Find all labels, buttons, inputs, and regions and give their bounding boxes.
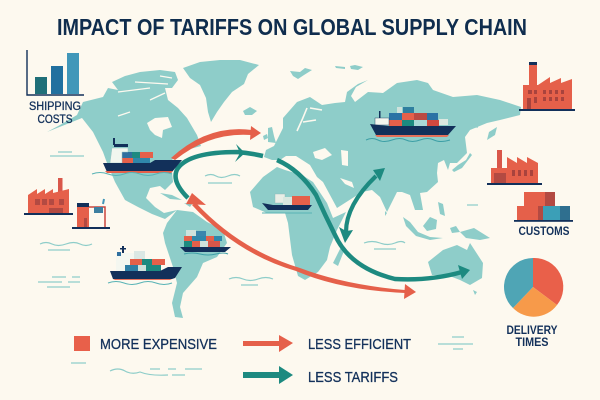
legend: less tariffs: LESS TARIFFS: [308, 369, 398, 386]
label: customs: CUSTOMS: [518, 224, 570, 238]
Iceland: [243, 107, 257, 115]
factory: west large: [24, 178, 73, 215]
arrow: teal double headed to Asia: [339, 168, 385, 243]
legend: less efficient: LESS EFFICIENT: [308, 336, 411, 353]
Eurasia: [264, 80, 521, 212]
arrow: teal across Atlantic to Australia: [176, 144, 470, 279]
label: shipping costs: SHIPPING: [29, 101, 81, 113]
Japan and Kamchatka: [452, 127, 497, 172]
Africa: [250, 167, 346, 280]
South America: [163, 210, 227, 318]
ship: Pacific: [108, 246, 182, 284]
Hudson Bay: [147, 117, 172, 138]
Tasmania: [473, 290, 477, 295]
label: delivery times: TIMES: [516, 335, 548, 349]
legend: less efficient: [243, 335, 411, 353]
arrow: red to Europe: [171, 126, 261, 160]
ship: Asia: [366, 107, 456, 142]
Australia: [428, 243, 483, 285]
title: IMPACT OF TARIFFS ON GLOBAL SUPPLY CHAIN: [57, 14, 527, 40]
pie chart: delivery times: [504, 258, 563, 349]
Greenland: [183, 60, 259, 122]
ship: South America: [180, 230, 231, 255]
world map: [47, 60, 521, 318]
containers: customs: [514, 192, 573, 238]
legend: more expensive: MORE EXPENSIVE: [100, 336, 217, 353]
ship: Africa: [262, 194, 312, 213]
factory: east middle: [487, 150, 542, 185]
bar chart: shipping costs: [27, 50, 84, 126]
Baltic: [297, 108, 322, 131]
arrow: red from Caribbean to Indian Ocean: [186, 193, 416, 299]
factory: north east: [519, 62, 575, 111]
customs gate: [72, 199, 110, 229]
UK and Ireland: [263, 127, 276, 143]
ship: North America: [92, 138, 182, 176]
label: shipping costs: COSTS: [38, 114, 73, 126]
Arctic islands of Russia: [335, 65, 363, 70]
legend: less tariffs: [243, 366, 398, 386]
SE Asia islands: [385, 202, 490, 240]
North America: [47, 70, 201, 219]
Svalbard: [290, 68, 312, 79]
Inland seas: [313, 148, 354, 188]
Arctic channels: [118, 76, 172, 116]
label: delivery times: DELIVERY: [506, 323, 558, 337]
Cuba and Caribbean: [160, 193, 192, 207]
Madagascar: [333, 247, 344, 266]
waves: [38, 127, 478, 375]
